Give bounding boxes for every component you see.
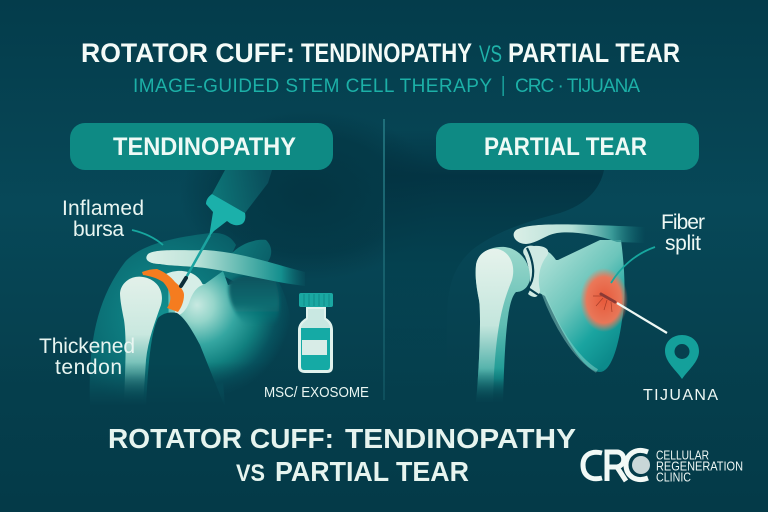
label: thickened tendon bbox=[39, 335, 135, 379]
bottom fade bbox=[0, 362, 383, 406]
lateral border of scapula bbox=[543, 292, 597, 371]
title: PARTIAL TEAR bbox=[508, 38, 680, 68]
bottom title: ROTATOR CUFF: bbox=[108, 423, 334, 454]
tear glow bbox=[580, 268, 628, 332]
clavicle bbox=[146, 250, 305, 286]
glenoid rim bbox=[166, 271, 203, 316]
bottom title: PARTIAL TEAR bbox=[275, 456, 469, 487]
label: fiber split: split bbox=[665, 232, 701, 255]
axilla dark shape bbox=[146, 313, 224, 405]
label: inflamed bursa: Inflamed bbox=[62, 197, 144, 220]
label: thickened tendon: tendon bbox=[55, 356, 122, 379]
icon: location pin bbox=[665, 335, 699, 379]
syringe bbox=[181, 170, 272, 286]
logo mark bbox=[583, 450, 648, 481]
bottom title: VS bbox=[236, 460, 265, 487]
label: fiber split: Fiber bbox=[661, 211, 705, 234]
panel: tendinopathy illustration bbox=[0, 110, 440, 406]
humerus bbox=[120, 277, 162, 405]
subtitle: IMAGE-GUIDED STEM CELL THERAPY bbox=[133, 76, 492, 97]
joint line bbox=[527, 248, 540, 296]
label: inflamed bursa bbox=[62, 197, 144, 241]
title bbox=[81, 38, 680, 68]
pill: partial tear: PARTIAL TEAR bbox=[484, 133, 647, 161]
dark upper background bbox=[180, 110, 440, 280]
glenoid bbox=[523, 246, 548, 297]
pill: tendinopathy: TENDINOPATHY bbox=[113, 133, 296, 161]
scapula bbox=[530, 240, 625, 372]
leader: fiber split bbox=[611, 247, 655, 283]
pill: partial tear bbox=[436, 123, 699, 170]
leader: inflamed bursa bbox=[132, 230, 163, 245]
dark area around body silhouette bbox=[385, 130, 640, 400]
label: thickened tendon: Thickened bbox=[39, 335, 135, 358]
title: ROTATOR CUFF: bbox=[81, 38, 295, 68]
vial bbox=[298, 293, 333, 373]
title: VS bbox=[479, 41, 502, 68]
bottom fade bbox=[385, 368, 768, 406]
panel: partial tear illustration bbox=[385, 130, 768, 406]
dark patch over scapula bbox=[229, 273, 279, 326]
logo: CRC bbox=[583, 448, 743, 484]
label: msc / exosome: MSC/ EXOSOME bbox=[264, 384, 369, 401]
logo wordmark bbox=[656, 448, 743, 484]
logo wordmark: CLINIC bbox=[656, 470, 691, 484]
label: inflamed bursa: bursa bbox=[73, 218, 124, 241]
logo wordmark: CELLULAR bbox=[656, 448, 709, 462]
orange tendon ring bbox=[142, 269, 184, 312]
label: fiber split bbox=[661, 211, 705, 255]
white pointer bbox=[617, 303, 667, 333]
shoulder silhouette bbox=[90, 233, 236, 405]
scapula bbox=[168, 271, 293, 405]
teal lobe behind clavicle bbox=[222, 240, 271, 285]
divider bbox=[383, 119, 385, 400]
subtitle: CRC · TIJUANA bbox=[515, 76, 640, 97]
logo wordmark: REGENERATION bbox=[656, 460, 743, 474]
clavicle bbox=[514, 224, 645, 244]
bottom title bbox=[108, 423, 576, 487]
label: tijuana: TIJUANA bbox=[643, 387, 718, 404]
pill: tendinopathy bbox=[70, 123, 333, 170]
bottom title: TENDINOPATHY bbox=[345, 423, 576, 454]
fiber split bbox=[593, 294, 615, 312]
title: TENDINOPATHY bbox=[301, 38, 472, 68]
humerus bbox=[476, 247, 530, 402]
